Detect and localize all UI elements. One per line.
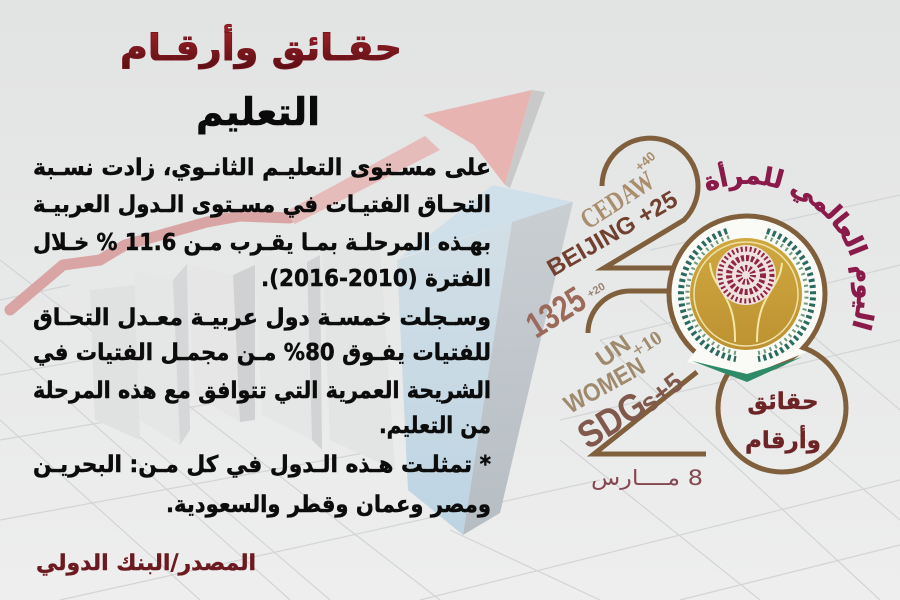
- logo: anniversary labels: +20: [585, 281, 608, 301]
- logo: curved title: اليوم العالمي للمرأة: [706, 161, 875, 331]
- logo: anniversary labels: +10: [628, 327, 666, 362]
- body text: من التعليم.: [379, 413, 491, 439]
- logo: 2020 numerals: [588, 138, 846, 472]
- logo: anniversary labels: CEDAW: [575, 165, 661, 236]
- logo: anniversary labels: SDG: [571, 384, 654, 458]
- source: المصدر/البنك الدولي: [36, 551, 256, 576]
- logo: anniversary labels: UN: [591, 330, 636, 373]
- logo: anniversary labels: [519, 148, 689, 458]
- logo: date: 8 مــــارس: [591, 466, 703, 490]
- logo: facts and figures: حقائق: [747, 389, 819, 415]
- logo: emblem: [669, 216, 825, 382]
- body text: * تمثلـت هـذه الـدول في كل مـن: البحريـن: [33, 452, 491, 478]
- body text: التحـاق الفتيـات في مسـتوى الـدول العربيـة: [33, 192, 491, 218]
- body text: الفترة (2010-2016).: [261, 266, 491, 292]
- body text: [33, 155, 491, 518]
- body text: وسـجلت خمسـة دول عربيـة معـدل التحـاق: [33, 305, 491, 331]
- logo: facts and figures: [745, 389, 821, 454]
- tree shape: [710, 263, 782, 342]
- gold disc: [690, 238, 802, 350]
- body text: الشريحة العمرية التي تتوافق مع هذه المرحلة: [33, 378, 491, 404]
- logo: facts and figures: وأرقام: [745, 424, 821, 454]
- body text: ومصر وعمان وقطر والسعودية.: [166, 492, 491, 518]
- body text: بهـذه المرحلـة بمـا يقـرب مـن 11.6 % خـلال: [33, 230, 491, 256]
- body text: على مسـتوى التعليـم الثانـوي، زادت نسـبة: [33, 155, 491, 181]
- background chart: rising arrow: [10, 90, 545, 310]
- logo: anniversary labels: 1325: [519, 278, 593, 346]
- logo: anniversary labels: WOMEN: [559, 352, 650, 419]
- logo: anniversary labels: +40: [632, 148, 658, 174]
- background chart: blue bar: [397, 185, 573, 535]
- title: حقـائق وأرقـام: [120, 24, 402, 69]
- calligraphy seal: [716, 245, 776, 305]
- body text: للفتيات يفـوق 80% مـن مجمـل الفتيات في: [33, 340, 491, 366]
- logo: anniversary labels: BEIJING +25: [542, 186, 682, 282]
- logo: anniversary labels: s+5: [634, 367, 689, 419]
- wreath: [681, 231, 813, 359]
- background chart: grey bars: [90, 240, 395, 470]
- heading: education: التعليم: [196, 90, 320, 135]
